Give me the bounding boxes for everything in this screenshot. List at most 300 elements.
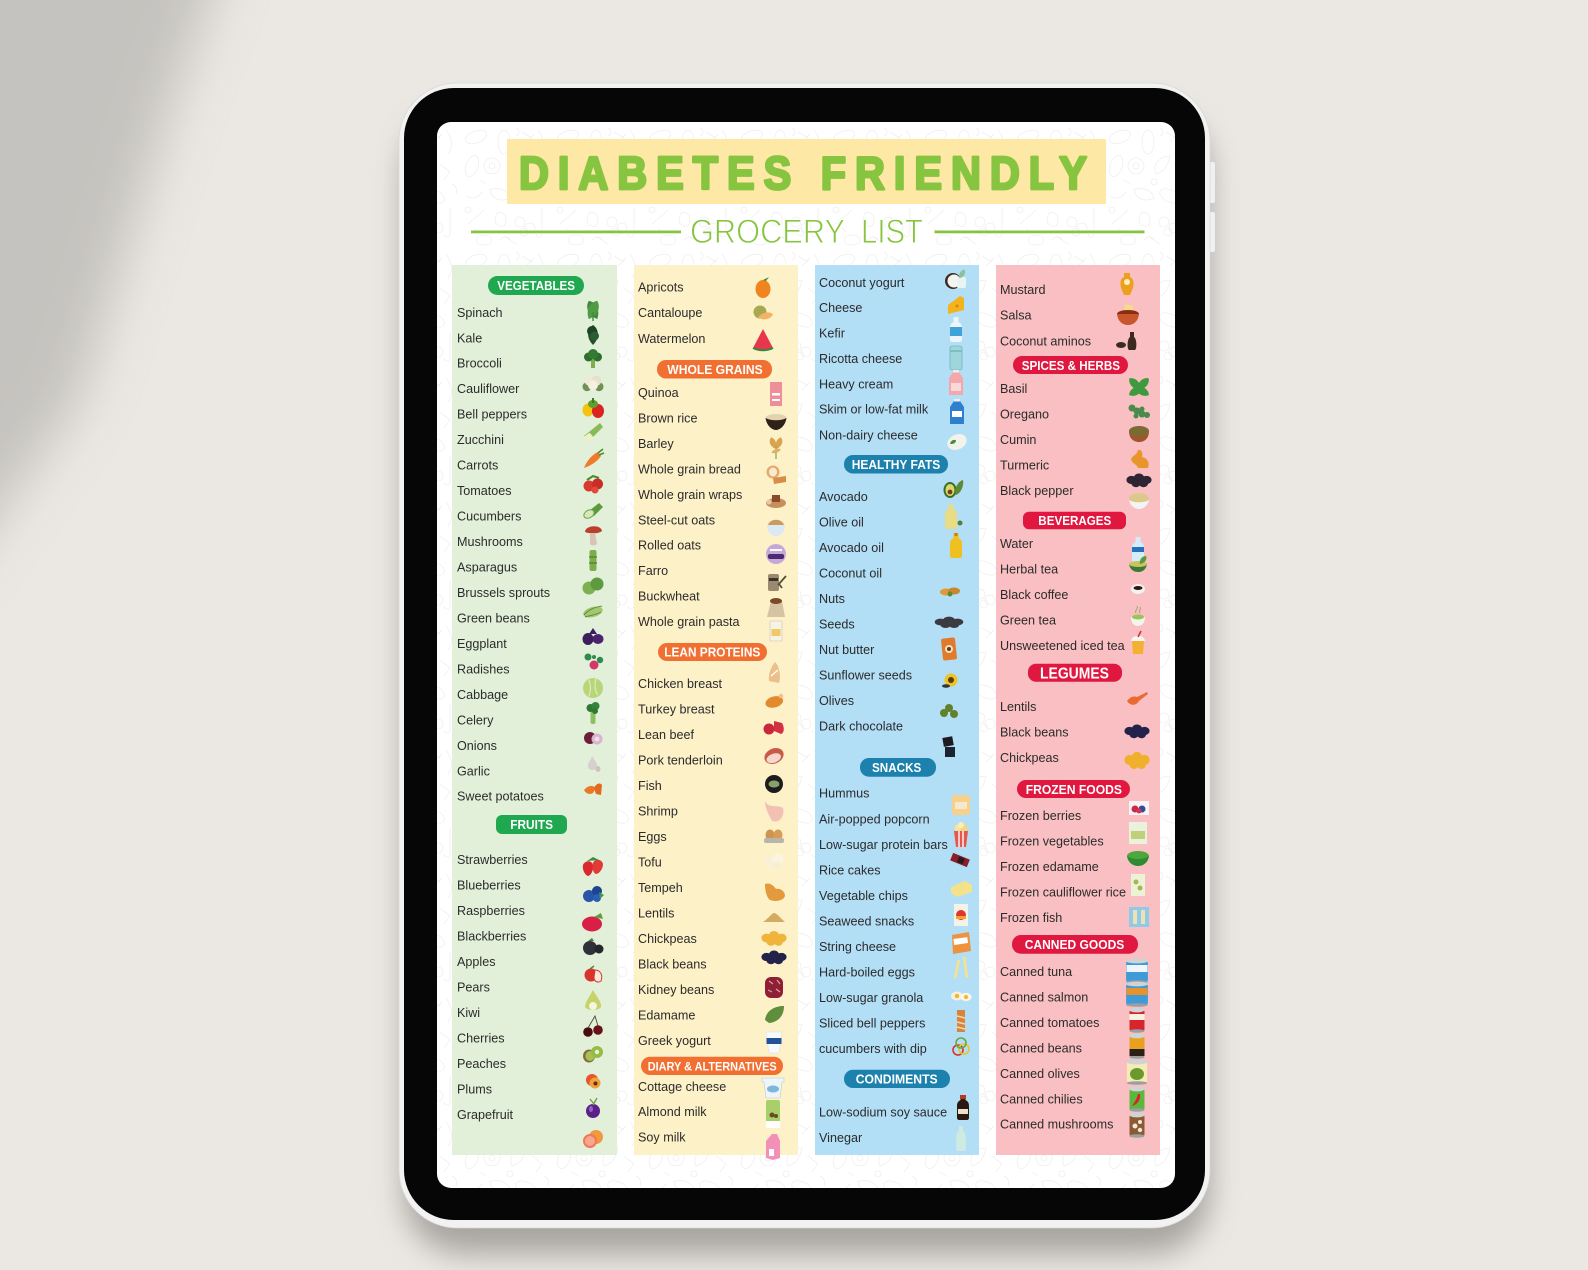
- item: String cheese: String cheese: [819, 940, 896, 954]
- subtitle text: GROCERY: [690, 213, 845, 251]
- item: Whole grain pasta: [638, 615, 782, 641]
- icon: garlic: [588, 755, 600, 772]
- item: Cumin: [1000, 426, 1149, 447]
- icon: sunflower: [942, 674, 958, 688]
- icon: brussels sprouts: [582, 578, 604, 594]
- item: Canned tuna: Canned tuna: [1000, 965, 1072, 979]
- item: Canned chilies: Canned chilies: [1000, 1092, 1083, 1106]
- item: Heavy cream: Heavy cream: [819, 378, 893, 392]
- item: Frozen edamame: [1000, 851, 1149, 874]
- item: Coconut oil: Coconut oil: [819, 566, 882, 580]
- silver frame: [399, 83, 1210, 1228]
- item: Hard-boiled eggs: Hard-boiled eggs: [819, 966, 915, 980]
- item: Rolled oats: [638, 538, 786, 564]
- icon: granola bar: [957, 1010, 965, 1032]
- item: Rice cakes: [819, 864, 972, 897]
- icon: cantaloupe: [754, 306, 773, 319]
- item: Turmeric: [1000, 450, 1149, 472]
- icon: green tea: [1131, 606, 1145, 626]
- item: Green beans: Green beans: [457, 611, 530, 625]
- icon: kiwi: [583, 1046, 603, 1062]
- badge: fruits: FRUITS: [510, 817, 553, 832]
- item: Apples: Apples: [457, 955, 496, 969]
- item: Tofu: Tofu: [638, 856, 662, 870]
- item: Cantaloupe: Cantaloupe: [638, 306, 702, 320]
- item: Nuts: [819, 592, 963, 628]
- item: Kidney beans: Kidney beans: [638, 983, 714, 997]
- item: Tempeh: [638, 881, 785, 901]
- icon: peach: [586, 1074, 600, 1088]
- item: Chicken breast: [638, 662, 780, 691]
- tablet device: [399, 83, 1215, 1228]
- item: Peaches: Peaches: [457, 1057, 506, 1071]
- icon: tomatoes: [584, 476, 603, 494]
- icon: canned chilies: [1130, 1087, 1144, 1112]
- item: Garlic: Garlic: [457, 764, 490, 778]
- item: Zucchini: [457, 423, 603, 447]
- icon: bread: [766, 466, 786, 484]
- icon: eggs: [764, 830, 784, 843]
- item: Vegetable chips: [819, 889, 968, 926]
- icon: iced tea: [1131, 631, 1145, 654]
- icon: soy milk carton: [766, 1134, 780, 1160]
- item: Pork tenderloin: Pork tenderloin: [638, 754, 723, 768]
- item: Barley: Barley: [638, 437, 674, 451]
- item: Pork tenderloin: [638, 745, 786, 768]
- item: Avocado oil: [819, 533, 962, 558]
- icon: rice cakes: [951, 881, 972, 897]
- subtitle with rules: [471, 213, 1144, 251]
- item: Soy milk: Soy milk: [638, 1130, 686, 1144]
- item: Rice cakes: Rice cakes: [819, 864, 881, 878]
- item: Coconut yogurt: Coconut yogurt: [819, 276, 905, 290]
- item: Frozen vegetables: [1000, 822, 1147, 848]
- item: Air-popped popcorn: [819, 812, 968, 847]
- icon: kale: [587, 325, 599, 345]
- item: Farro: Farro: [638, 564, 668, 578]
- icon: vinegar: [956, 1126, 966, 1151]
- icon: blueberries: [583, 886, 604, 902]
- icon: blackberries: [583, 938, 604, 955]
- item: Peaches: [457, 1057, 600, 1088]
- item: Spinach: Spinach: [457, 306, 503, 320]
- badge: whole grains: WHOLE GRAINS: [667, 362, 763, 377]
- badge: lean proteins: LEAN PROTEINS: [664, 644, 761, 660]
- subtitle text: LIST: [861, 213, 923, 251]
- item: Turkey breast: [638, 694, 784, 716]
- item: Onions: Onions: [457, 739, 497, 753]
- badge: canned goods: CANNED GOODS: [1025, 937, 1125, 952]
- icon: black beans: [1124, 725, 1150, 738]
- item: Farro: [638, 564, 786, 591]
- icon: sweet potatoes: [584, 783, 602, 795]
- icon: plum: [586, 1098, 600, 1118]
- icon: lentils spoon: [1127, 692, 1148, 705]
- badge: canned goods: [1012, 935, 1138, 954]
- item: Tofu: [638, 854, 784, 870]
- item: Canned olives: [1000, 1060, 1147, 1085]
- icon: cauliflower: [582, 376, 604, 391]
- icon: zucchini: [583, 423, 603, 443]
- icon: cucumber: [582, 503, 603, 520]
- item: Cherries: [457, 1031, 603, 1062]
- item: Radishes: [457, 654, 603, 676]
- item: Seaweed snacks: [819, 914, 971, 954]
- icon: brown rice bowl: [766, 414, 786, 430]
- icon: canned tuna: [1126, 959, 1148, 984]
- icon: canned beans: [1130, 1034, 1144, 1059]
- item: Fish: [638, 775, 783, 793]
- icon: spinach: [584, 299, 602, 321]
- item: Buckwheat: Buckwheat: [638, 590, 700, 604]
- item: Edamame: Edamame: [638, 1008, 695, 1022]
- item: Chickpeas: Chickpeas: [638, 932, 697, 946]
- item: Strawberries: [457, 853, 603, 876]
- item: Green tea: Green tea: [1000, 614, 1056, 628]
- item: Olive oil: [819, 504, 962, 530]
- icon: pasta jar: [770, 621, 782, 641]
- item: Ricotta cheese: [819, 346, 962, 370]
- icon: pork: [762, 745, 786, 767]
- item: Blackberries: Blackberries: [457, 930, 526, 944]
- item: Cantaloupe: [638, 306, 773, 320]
- item: Low-sugar protein bars: Low-sugar protein bars: [819, 838, 948, 852]
- item: Chickpeas: [638, 931, 787, 946]
- item: Nuts: Nuts: [819, 592, 845, 606]
- icon: watermelon: [753, 329, 773, 350]
- icon: frozen fish: [1129, 907, 1149, 927]
- item: Vinegar: [819, 1126, 966, 1151]
- item: Watermelon: [638, 329, 773, 350]
- item: Frozen vegetables: Frozen vegetables: [1000, 834, 1104, 848]
- icon: chickpeas: [761, 931, 787, 946]
- item: Cheese: [819, 296, 964, 315]
- item: Quinoa: [638, 382, 782, 406]
- item: Frozen cauliflower rice: [1000, 874, 1145, 900]
- icon: fish dish: [765, 775, 783, 793]
- item: Kidney beans: [638, 977, 783, 998]
- item: Low-sugar protein bars: [819, 838, 970, 867]
- item: Cumin: Cumin: [1000, 433, 1036, 447]
- item: Brussels sprouts: Brussels sprouts: [457, 586, 550, 600]
- icon: frozen vegetables: [1129, 822, 1147, 844]
- item: Shrimp: Shrimp: [638, 804, 678, 818]
- item: Cabbage: Cabbage: [457, 688, 508, 702]
- badge: condiments: [844, 1070, 950, 1088]
- icon: radishes: [584, 654, 603, 670]
- item: Nut butter: Nut butter: [819, 643, 874, 657]
- item: Sliced bell peppers: Sliced bell peppers: [819, 1016, 925, 1030]
- item: Kefir: [819, 317, 962, 342]
- icon: black pepper: [1126, 474, 1152, 487]
- item: Blueberries: [457, 879, 604, 902]
- item: Canned tomatoes: Canned tomatoes: [1000, 1016, 1099, 1030]
- icon: raspberries: [582, 913, 603, 932]
- icon: chickpea bowl: [1129, 493, 1149, 509]
- icon: grapefruit: [583, 1130, 603, 1148]
- icon: canned mushrooms: [1130, 1113, 1144, 1138]
- icon: tempeh: [765, 883, 785, 901]
- item: Pears: [457, 980, 601, 1010]
- icon: kefir bottle: [950, 317, 962, 342]
- item: Herbal tea: [1000, 555, 1148, 576]
- icon: nut butter jar: [941, 637, 957, 661]
- doodle pattern: [437, 122, 1175, 1188]
- icon: strawberries: [583, 857, 603, 876]
- item: Black beans: Black beans: [1000, 726, 1069, 740]
- item: Lentils: [1000, 692, 1148, 714]
- item: Sweet potatoes: Sweet potatoes: [457, 790, 544, 804]
- item: Almond milk: [638, 1100, 780, 1128]
- item: Water: [1000, 537, 1144, 562]
- panel: condiments, spices, beverages, legumes, frozen, canned: [996, 265, 1160, 1155]
- icon: asparagus: [589, 550, 597, 571]
- item: Olives: [819, 694, 955, 757]
- icon: pears: [585, 990, 601, 1010]
- icon: coffee cup: [1131, 584, 1145, 594]
- icon: quinoa bag: [770, 382, 782, 406]
- title text: DIABETES FRIENDLY: [519, 148, 1087, 200]
- item: Sliced bell peppers: [819, 1016, 969, 1055]
- item: Chickpeas: Chickpeas: [1000, 751, 1059, 765]
- item: Frozen berries: Frozen berries: [1000, 809, 1081, 823]
- icon: oregano: [1128, 404, 1150, 418]
- item: Low-sugar granola: [819, 991, 965, 1032]
- item: Hard-boiled eggs: [819, 966, 972, 1001]
- item: Non-dairy cheese: Non-dairy cheese: [819, 428, 918, 442]
- item: Low-sugar granola: Low-sugar granola: [819, 991, 923, 1005]
- item: String cheese: [819, 940, 967, 978]
- item: Oregano: Oregano: [1000, 408, 1049, 422]
- badge: vegetables: VEGETABLES: [497, 278, 575, 293]
- badge: snacks: [860, 758, 936, 777]
- icon: bell peppers: [582, 398, 604, 418]
- badge: legumes: LEGUMES: [1040, 665, 1109, 682]
- item: Brown rice: [638, 412, 786, 430]
- item: Celery: [457, 702, 600, 727]
- icon: dark chocolate: [942, 736, 955, 757]
- panel: fruits, grains, proteins, dairy: [634, 265, 798, 1160]
- item: Lean beef: Lean beef: [638, 728, 695, 742]
- item: Blackberries: [457, 930, 604, 955]
- item: Ricotta cheese: Ricotta cheese: [819, 352, 902, 366]
- item: Canned salmon: Canned salmon: [1000, 990, 1088, 1004]
- item: Heavy cream: [819, 370, 963, 395]
- item: Raspberries: Raspberries: [457, 904, 525, 918]
- icon: nuts: [940, 588, 960, 596]
- item: Plums: [457, 1082, 600, 1118]
- item: Hummus: Hummus: [819, 786, 869, 800]
- icon: celery: [586, 702, 600, 724]
- item: Cucumbers: Cucumbers: [457, 510, 521, 524]
- item: Eggplant: [457, 628, 604, 651]
- badge: frozen foods: FROZEN FOODS: [1026, 782, 1122, 797]
- icon: water bottle: [1132, 537, 1144, 562]
- item: Asparagus: [457, 550, 597, 574]
- icon: snack bag: [952, 932, 971, 954]
- item: Chickpeas: [1000, 751, 1150, 769]
- icon: frozen berries: [1129, 801, 1149, 815]
- item: Canned mushrooms: [1000, 1113, 1144, 1138]
- item: Frozen fish: Frozen fish: [1000, 911, 1062, 925]
- item: Cucumbers: [457, 503, 603, 524]
- icon: avocado oil: [950, 533, 962, 558]
- item: Black beans: [1000, 725, 1150, 740]
- item: Celery: Celery: [457, 713, 494, 727]
- item: Dark chocolate: Dark chocolate: [819, 720, 903, 734]
- item: Chicken breast: Chicken breast: [638, 677, 723, 691]
- icon: chicken breast: [769, 662, 780, 683]
- item: Green tea: [1000, 606, 1145, 628]
- item: Frozen berries: [1000, 801, 1149, 823]
- icon: olives: [940, 704, 958, 718]
- icon: edamame: [765, 1006, 784, 1023]
- icon: frozen cauliflower: [1131, 874, 1145, 896]
- icon: seeds: [935, 617, 963, 628]
- badge: fruits: [496, 815, 567, 834]
- item: Low-sodium soy sauce: [819, 1095, 969, 1120]
- item: Greek yogurt: [638, 1032, 782, 1053]
- item: Water: Water: [1000, 537, 1033, 551]
- item: Lentils: Lentils: [1000, 700, 1036, 714]
- item: Cheese: Cheese: [819, 301, 862, 315]
- icon: ricotta tub: [950, 346, 962, 370]
- item: Broccoli: [457, 349, 602, 371]
- badge: healthy fats: HEALTHY FATS: [852, 457, 941, 472]
- icon: black beans: [761, 951, 787, 964]
- item: Olives: Olives: [819, 694, 854, 708]
- icon: non-dairy cheese: [945, 431, 969, 453]
- item: Cottage cheese: Cottage cheese: [638, 1080, 726, 1094]
- item: Cottage cheese: [638, 1078, 784, 1098]
- icon: cabbage: [583, 678, 603, 698]
- item: Canned beans: Canned beans: [1000, 1042, 1082, 1056]
- icon: boiled eggs: [951, 992, 972, 1001]
- item: Barley: [638, 436, 784, 459]
- icon: onions: [584, 732, 602, 744]
- item: Broccoli: Broccoli: [457, 357, 502, 371]
- item: Tomatoes: Tomatoes: [457, 484, 512, 498]
- item: Turmeric: Turmeric: [1000, 458, 1049, 472]
- item: Kale: Kale: [457, 331, 482, 345]
- item: Sweet potatoes: [457, 783, 602, 804]
- item: Lentils: Lentils: [638, 906, 674, 920]
- item: Radishes: Radishes: [457, 662, 510, 676]
- item: Cauliflower: Cauliflower: [457, 382, 519, 396]
- item: Seaweed snacks: Seaweed snacks: [819, 914, 914, 928]
- item: Lean beef: [638, 721, 784, 742]
- item: Bell peppers: [457, 398, 604, 422]
- icon: cottage cheese tub: [762, 1078, 784, 1098]
- item: Salsa: [1000, 304, 1139, 325]
- item: Avocado: Avocado: [819, 490, 868, 504]
- item: Canned chilies: [1000, 1087, 1144, 1112]
- item: Salsa: Salsa: [1000, 308, 1032, 322]
- item: Strawberries: Strawberries: [457, 853, 528, 867]
- item: Whole grain wraps: [638, 488, 786, 508]
- item: Low-sodium soy sauce: Low-sodium soy sauce: [819, 1106, 947, 1120]
- item: Black coffee: Black coffee: [1000, 588, 1068, 602]
- icon: basil: [1127, 376, 1151, 398]
- icon: lean beef: [764, 721, 784, 734]
- item: Tempeh: Tempeh: [638, 881, 683, 895]
- icon: protein bar: [950, 853, 970, 867]
- icon: hummus jar: [952, 795, 970, 815]
- icon: carrot: [584, 449, 604, 468]
- item: Apricots: Apricots: [638, 280, 684, 294]
- item: Canned salmon: [1000, 982, 1148, 1007]
- item: Olive oil: Olive oil: [819, 516, 864, 530]
- icon: farro: [768, 574, 786, 591]
- icon: olive oil: [945, 504, 962, 529]
- item: Bell peppers: Bell peppers: [457, 408, 527, 422]
- icon: turmeric: [1131, 450, 1149, 468]
- item: Avocado oil: Avocado oil: [819, 541, 884, 555]
- item: Garlic: [457, 755, 600, 778]
- item: Herbal tea: Herbal tea: [1000, 562, 1058, 576]
- item: Rolled oats: Rolled oats: [638, 538, 701, 552]
- icon: kidney beans: [765, 977, 783, 998]
- item: Turkey breast: Turkey breast: [638, 702, 715, 716]
- panel: vegetables and fruits: [452, 265, 617, 1155]
- item: Mushrooms: Mushrooms: [457, 535, 523, 549]
- item: Canned beans: [1000, 1034, 1144, 1059]
- icon: cumin bowl: [1129, 426, 1149, 442]
- item: Basil: [1000, 376, 1151, 398]
- item: Frozen cauliflower rice: Frozen cauliflower rice: [1000, 886, 1126, 900]
- item: Brown rice: Brown rice: [638, 412, 698, 426]
- item: Eggs: [638, 830, 784, 844]
- icon: mustard bottle: [1120, 273, 1134, 295]
- icon: broccoli: [584, 349, 602, 368]
- item: Kale: [457, 325, 599, 345]
- item: Shrimp: [638, 801, 783, 822]
- icon: string cheese: [955, 957, 967, 978]
- badge: snacks: SNACKS: [872, 760, 922, 775]
- item: Coconut oil: [819, 566, 960, 596]
- item: Plums: Plums: [457, 1082, 492, 1096]
- title banner: [507, 139, 1106, 204]
- item: Greek yogurt: Greek yogurt: [638, 1034, 711, 1048]
- panel: dairy, fats, snacks, condiments: [815, 265, 979, 1155]
- icon: cherries: [583, 1016, 603, 1037]
- icon: eggplant: [582, 628, 604, 645]
- badge: beverages: [1023, 512, 1126, 529]
- item: Mustard: Mustard: [1000, 283, 1046, 297]
- icon: wraps: [766, 495, 786, 508]
- item: Canned tuna: [1000, 959, 1148, 984]
- badge: spices and herbs: SPICES & HERBS: [1022, 358, 1120, 373]
- icon: milk carton: [950, 399, 964, 424]
- icon: almond milk carton: [766, 1100, 780, 1128]
- item: Frozen edamame: Frozen edamame: [1000, 860, 1099, 874]
- item: Kefir: Kefir: [819, 326, 845, 340]
- icon: salsa: [1117, 304, 1139, 325]
- item: Black beans: [638, 951, 787, 972]
- item: Oregano: [1000, 404, 1150, 422]
- item: Sunflower seeds: [819, 668, 958, 718]
- icon: green beans: [582, 605, 604, 619]
- icon: pepper rings: [953, 1038, 969, 1055]
- item: Seeds: [819, 618, 957, 661]
- item: Grapefruit: Grapefruit: [457, 1108, 513, 1122]
- item: cucumbers with dip: cucumbers with dip: [819, 1042, 927, 1056]
- item: Soy milk: [638, 1130, 780, 1160]
- item: Raspberries: [457, 904, 603, 932]
- item: Cherries: Cherries: [457, 1031, 505, 1045]
- icon: coconut aminos: [1116, 332, 1136, 350]
- item: Non-dairy cheese: [819, 428, 969, 453]
